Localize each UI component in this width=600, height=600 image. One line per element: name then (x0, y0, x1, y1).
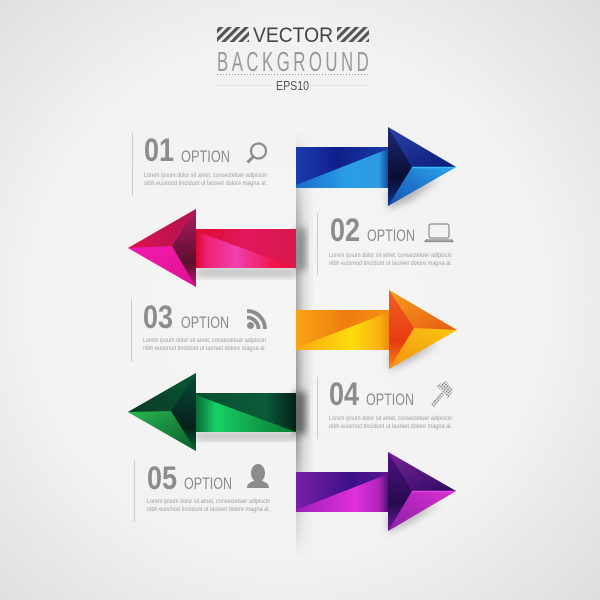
option 04: 04 (329, 376, 359, 412)
option 05 (134, 460, 270, 522)
arrow 5: purple (296, 452, 456, 533)
icon: person (247, 464, 269, 488)
title: VECTOR (253, 24, 333, 47)
option 03: nibh euismod tincidunt ut laoreet dolore magna al. (143, 345, 266, 352)
arrow 1: blue (296, 127, 456, 209)
option 05: 05 (147, 460, 177, 496)
option 02 (318, 212, 453, 275)
title: BACKGROUND (217, 46, 369, 77)
title: EPS10 (276, 79, 309, 93)
title (216, 24, 369, 93)
option 01 (132, 132, 267, 196)
option 04: OPTION (366, 390, 414, 409)
option 04: nibh euismod tincidunt ut laoreet dolore magna al. (329, 423, 452, 430)
option 05: Lorem ipsum dolor sit amet, consectetuer adipiscin (147, 498, 270, 505)
option 02: 02 (330, 212, 360, 248)
option 03: OPTION (181, 313, 229, 332)
icon: laptop (425, 224, 453, 242)
option 05: nibh euismod tincidunt ut laoreet dolore magna al. (147, 506, 270, 513)
icon: magnifier (248, 144, 266, 162)
option 01: 01 (144, 132, 174, 168)
option 02: OPTION (367, 226, 415, 245)
icon: pixel arrow (431, 381, 453, 407)
option 03: 03 (143, 299, 173, 335)
arrow 3: orange (296, 290, 457, 371)
option 05: OPTION (184, 474, 232, 493)
arrow 2: pink (128, 209, 306, 287)
icon: rss (247, 311, 265, 329)
option 01: OPTION (181, 147, 230, 166)
option 04 (318, 376, 453, 439)
option 02: Lorem ipsum dolor sit amet, consectetuer adipiscin (329, 252, 452, 259)
paper panel shadow (296, 141, 311, 548)
option 03: Lorem ipsum dolor sit amet, consectetuer adipiscin (143, 337, 266, 344)
option 03 (132, 299, 266, 362)
option 01: nibh euismod tincidunt ut laoreet dolore magna al. (144, 180, 267, 187)
option 02: nibh euismod tincidunt ut laoreet dolore magna al. (329, 260, 452, 267)
option 04: Lorem ipsum dolor sit amet, consectetuer adipiscin (329, 415, 452, 422)
option 01: Lorem ipsum dolor sit amet, consectetuer adipiscin (144, 172, 267, 179)
arrow 4: green (128, 373, 306, 451)
